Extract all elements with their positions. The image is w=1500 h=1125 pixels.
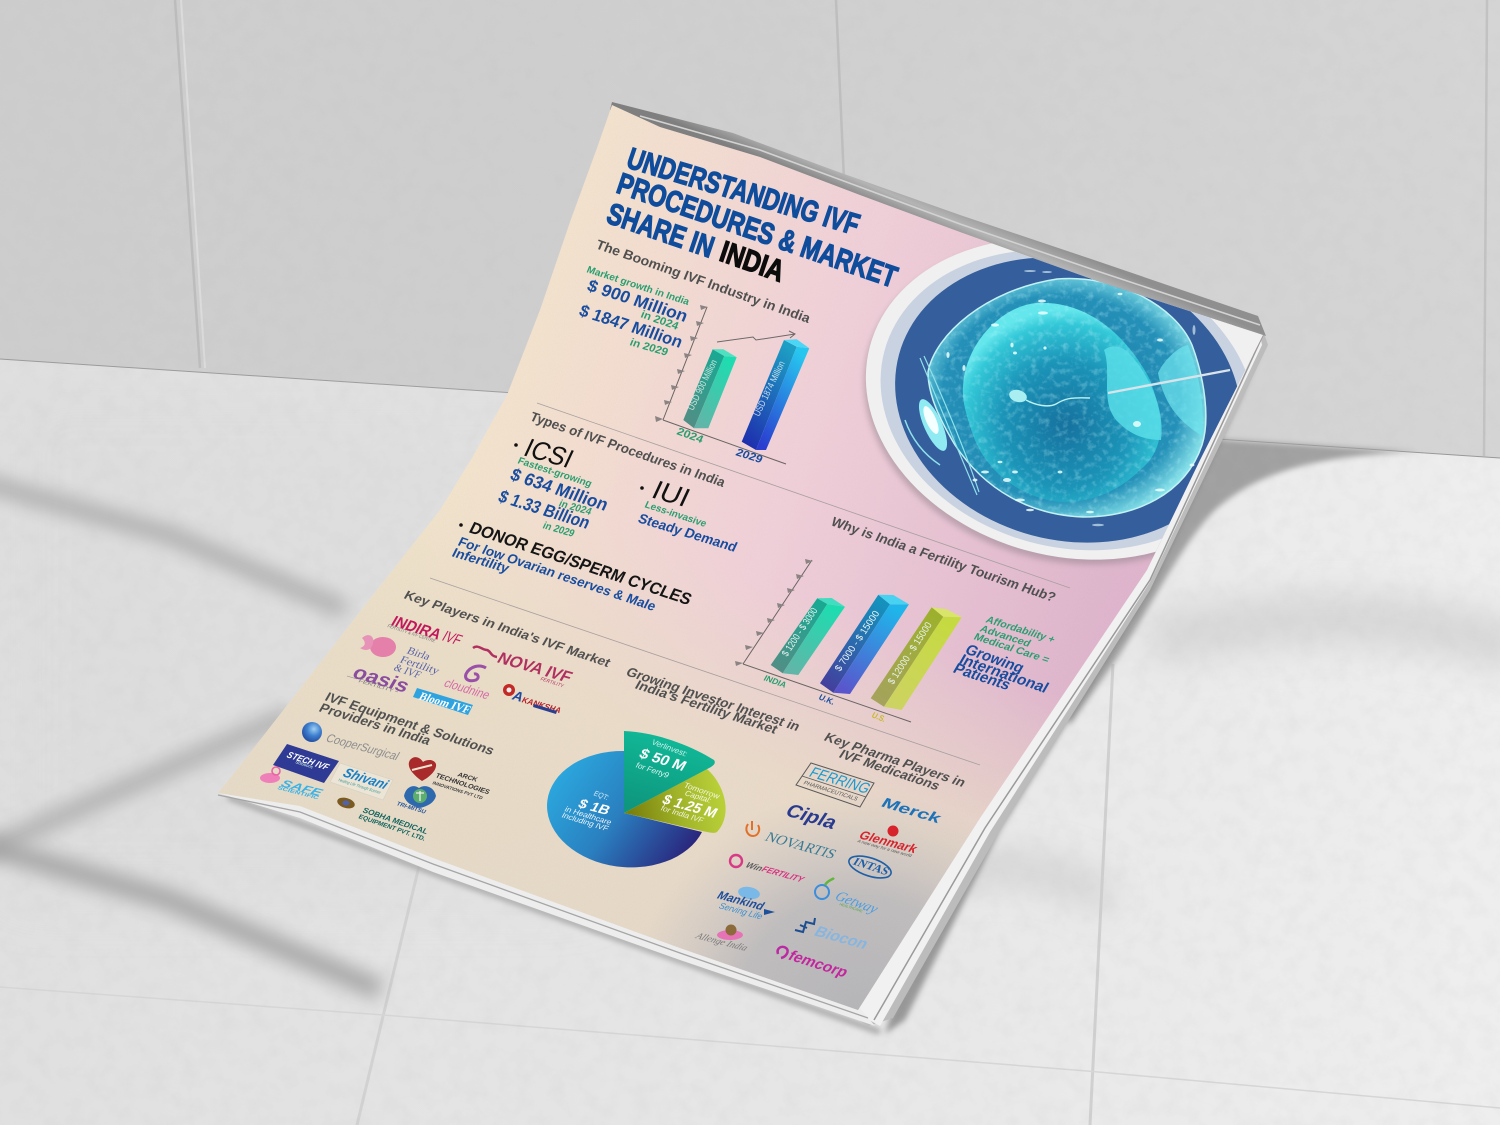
logo: WinFertility: Win <box>744 860 765 873</box>
icon: pipette bulge <box>1158 345 1203 436</box>
section: pharma players <box>692 730 969 981</box>
market growth figures: in 2029 <box>628 337 670 359</box>
logo: Tri-Mitsu <box>395 786 436 815</box>
logo: Novartis <box>746 821 839 862</box>
bar chart: cost by country: U.K. <box>817 692 837 707</box>
callout: growing international patients <box>950 615 1057 696</box>
section: investor interest: India's Fertility Market <box>632 678 781 737</box>
logo: Nova IVF: FERTILITY <box>539 677 565 689</box>
IUI block: Steady Demand <box>636 510 740 555</box>
logo: ARCK Technologies: ARCK <box>456 772 479 784</box>
callout: growing international patients: Medical Care = <box>971 632 1051 666</box>
logo: CooperSurgical <box>302 722 402 763</box>
logo: CooperSurgical: CooperSurgical <box>323 732 402 763</box>
pie labels: EQT: <box>592 789 611 802</box>
bar India: $ 1200 - $ 3000 <box>780 606 821 659</box>
callout: growing international patients: Growing <box>962 642 1027 677</box>
logo: Tri-Mitsu: TRI-MITSU <box>395 802 427 815</box>
IUI block: Less-invasive <box>643 500 709 530</box>
section: key players <box>347 588 614 716</box>
logo: Mankind: Serving Life <box>716 901 765 922</box>
logo: Birla Fertility: & IVF <box>391 662 423 681</box>
IUI block <box>636 475 740 555</box>
logo: ARCK Technologies <box>409 757 491 801</box>
logo: Ferring: PHARMACEUTICALS <box>802 781 859 802</box>
logo: Mankind: Mankind <box>714 889 767 913</box>
slice: Verlinvest <box>624 731 715 813</box>
bar 2029 <box>742 339 809 450</box>
ICSI block <box>495 433 612 540</box>
pie labels: Capital: <box>683 789 713 805</box>
logo: Getway <box>815 878 881 917</box>
logo: Sobha Medical <box>336 796 430 843</box>
logo: Indira IVF <box>386 614 465 649</box>
pie labels: $ 1.25 M <box>659 792 720 821</box>
pie labels: $ 1B <box>575 796 613 818</box>
concrete wall background <box>0 0 1500 460</box>
bar chart: market size 2024 vs 2029: 2029 <box>734 447 764 466</box>
circular image of IVF egg and sperm <box>862 244 1263 567</box>
section: investor interest <box>547 665 803 867</box>
logo: Bloom IVF: Bloom IVF <box>416 690 473 716</box>
logo: Getway: HEALTHCARE <box>838 902 864 913</box>
heading: Growing Investor Interest in <box>623 665 803 734</box>
section: pharma players: IVF Medications <box>836 747 943 793</box>
title: PROCEDURES & MARKET <box>613 167 902 295</box>
title: UNDERSTANDING IVF <box>623 142 863 242</box>
pie labels: $ 50 M <box>636 746 689 775</box>
bar 2024: USD 900 Million <box>686 358 720 412</box>
pie labels: Including IVF <box>560 811 610 833</box>
logo: Cipla: Cipla <box>781 801 842 833</box>
logo: Biocon <box>795 918 871 952</box>
heading: Key Players in India's IVF Market <box>401 588 614 670</box>
bar UK <box>820 595 909 694</box>
ICSI block: Fastest-growing <box>516 456 594 490</box>
logo: Birla Fertility: Birla <box>404 645 432 663</box>
callout: growing international patients: International <box>956 652 1051 696</box>
logo: Cloudnine <box>441 666 493 702</box>
slice: Tomorrow Capital <box>624 769 726 833</box>
market growth figures: $ 1847 Million <box>576 301 685 352</box>
logo: Novartis: NOVARTIS <box>762 830 839 862</box>
title: INDIA <box>716 235 788 289</box>
market growth figures <box>576 265 691 359</box>
logo: Birla Fertility: Fertility <box>397 654 442 677</box>
bar chart: cost by country <box>735 559 962 724</box>
section: equipment providers <box>260 690 497 843</box>
logo: Ferring <box>796 763 874 807</box>
logo: Oasis Fertility: oasis <box>348 662 413 697</box>
logo: Nova IVF: NOVA IVF <box>494 649 576 686</box>
ICSI block: $ 1.33 Billion <box>495 487 594 533</box>
cell speckle highlights <box>946 270 1196 526</box>
donor egg block: DONOR EGG/SPERM CYCLES <box>466 519 695 609</box>
ICSI block: in 2024 <box>557 499 593 518</box>
heading: Key Pharma Players in <box>821 730 969 790</box>
logo: STech IVF: STECH IVF <box>284 750 331 773</box>
logo: Ferring: FERRING <box>806 765 874 797</box>
heading: Why is India a Fertility Tourism Hub? <box>829 514 1058 605</box>
logo: Getway: Getway <box>832 889 881 917</box>
arrow: upward trend <box>717 331 795 342</box>
icon: microinjection needle <box>1108 370 1230 393</box>
bar 2029: USD 1874 Million <box>752 360 788 418</box>
logo: Safe Scientific <box>260 767 325 801</box>
icon: sperm <box>1008 388 1090 406</box>
callout: growing international patients: Patients <box>950 661 1014 693</box>
logo: Glenmark: Glenmark <box>856 828 921 856</box>
logo: Shivani: Shivani <box>340 765 392 792</box>
heading: IVF Equipment & Solutions <box>322 690 497 758</box>
bar UK: $ 7000 - $ 15000 <box>833 609 883 674</box>
section: equipment providers: Providers in India <box>316 701 434 748</box>
logo: WinFertility: FERTILITY <box>760 864 807 884</box>
market growth figures: Market growth in India <box>585 265 691 308</box>
logo: Sobha Medical: SOBHA MEDICAL <box>361 806 430 836</box>
section: the booming IVF industry <box>576 237 813 466</box>
logo: Biocon: Biocon <box>811 924 871 952</box>
logo: ARCK Technologies: INNOVATIONS PVT LTD <box>431 781 484 801</box>
bar 2024 <box>683 349 737 428</box>
logo: Indira IVF: INDIRA <box>388 614 445 643</box>
logo: Akanksha: KANKSHA <box>520 695 563 715</box>
pie labels: for Ferty9 <box>634 761 671 780</box>
market growth figures: $ 900 Million <box>584 276 691 326</box>
section: types of IVF procedures <box>450 409 740 614</box>
logo: Oasis Fertility: FERTILITY <box>357 679 395 694</box>
logo: Safe Scientific: SCIENTIFIC <box>276 786 320 801</box>
logo: STech IVF <box>273 744 339 783</box>
pie labels <box>560 738 722 833</box>
logo: Sobha Medical: EQUIPMENT PVT. LTD. <box>357 814 427 843</box>
logo: WinFertility <box>730 855 807 884</box>
logo: Intas <box>846 852 894 882</box>
section: fertility tourism hub <box>735 514 1058 724</box>
icon: egg cell outer membrane <box>928 278 1206 517</box>
concrete floor with light and window shadows <box>0 340 1500 1125</box>
slice: EQT <box>547 751 702 867</box>
title: SHARE IN <box>603 197 718 265</box>
pie labels: in Healthcare <box>563 805 614 827</box>
ICSI block: ICSI <box>519 433 578 473</box>
bar chart: market size 2024 vs 2029 <box>655 305 809 466</box>
bar chart: cost by country: INDIA <box>762 673 789 690</box>
IUI block: IUI <box>647 475 695 512</box>
logo: Indira IVF: IVF <box>439 629 465 649</box>
icon: polar crescent <box>1104 346 1162 440</box>
logo: Merck: Merck <box>878 795 946 827</box>
logo: Cloudnine: cloudnine <box>441 676 493 702</box>
ICSI block: in 2029 <box>541 521 576 540</box>
icon: left polar body <box>905 356 979 495</box>
icon: egg cell inner body <box>963 303 1160 502</box>
bar chart: cost by country: U.S. <box>870 710 888 724</box>
heading: Types of IVF Procedures in India <box>528 409 728 490</box>
logo: Birla Fertility <box>360 635 442 681</box>
logo: Safe Scientific: SAFE <box>278 778 325 799</box>
donor egg block: For low Ovarian reserves & Male <box>456 534 659 614</box>
logo: Glenmark: A new way for a new world <box>856 839 913 858</box>
market growth figures: in 2024 <box>639 309 681 333</box>
pie labels: Tomorrow <box>682 781 722 801</box>
logo: Femcorp: femcorp <box>785 948 851 981</box>
logo: Nova IVF <box>473 647 576 689</box>
logo: Shivani: Healing Life Through Science <box>337 778 382 795</box>
logo: ARCK Technologies: TECHNOLOGIES <box>434 773 491 796</box>
magazine cover page background <box>200 100 1280 1030</box>
donor egg block: Infertility <box>450 545 512 576</box>
logo: Mankind <box>714 885 775 922</box>
logo: Akanksha <box>503 684 563 715</box>
heading: The Booming IVF Industry in India <box>594 237 813 326</box>
logo: Akanksha: A <box>509 688 527 704</box>
logo: Allenge India: Allenge India <box>692 931 750 953</box>
logo: Indira IVF: FERTILITY & IVF CENTRE <box>386 624 437 644</box>
bar India <box>771 598 845 675</box>
ICSI block: $ 634 Million <box>507 465 612 515</box>
bar chart: market size 2024 vs 2029: 2024 <box>675 426 706 446</box>
magazine page stack <box>218 102 1268 1026</box>
logo: Shivani <box>330 763 393 800</box>
logo: Intas: INTAS <box>850 855 893 878</box>
bar US <box>871 607 962 710</box>
decorative section dividers <box>430 403 1070 765</box>
pie labels: for India IVF <box>659 804 706 825</box>
bar US: $ 12000 - $ 15000 <box>886 620 935 687</box>
pie chart: investments <box>547 731 726 867</box>
logo: STech IVF: Solutions <box>294 760 315 770</box>
title <box>603 142 902 295</box>
callout: growing international patients: Advanced <box>977 624 1033 649</box>
pie labels: Verlinvest: <box>650 738 689 758</box>
callout: growing international patients: Affordability + <box>983 615 1057 646</box>
